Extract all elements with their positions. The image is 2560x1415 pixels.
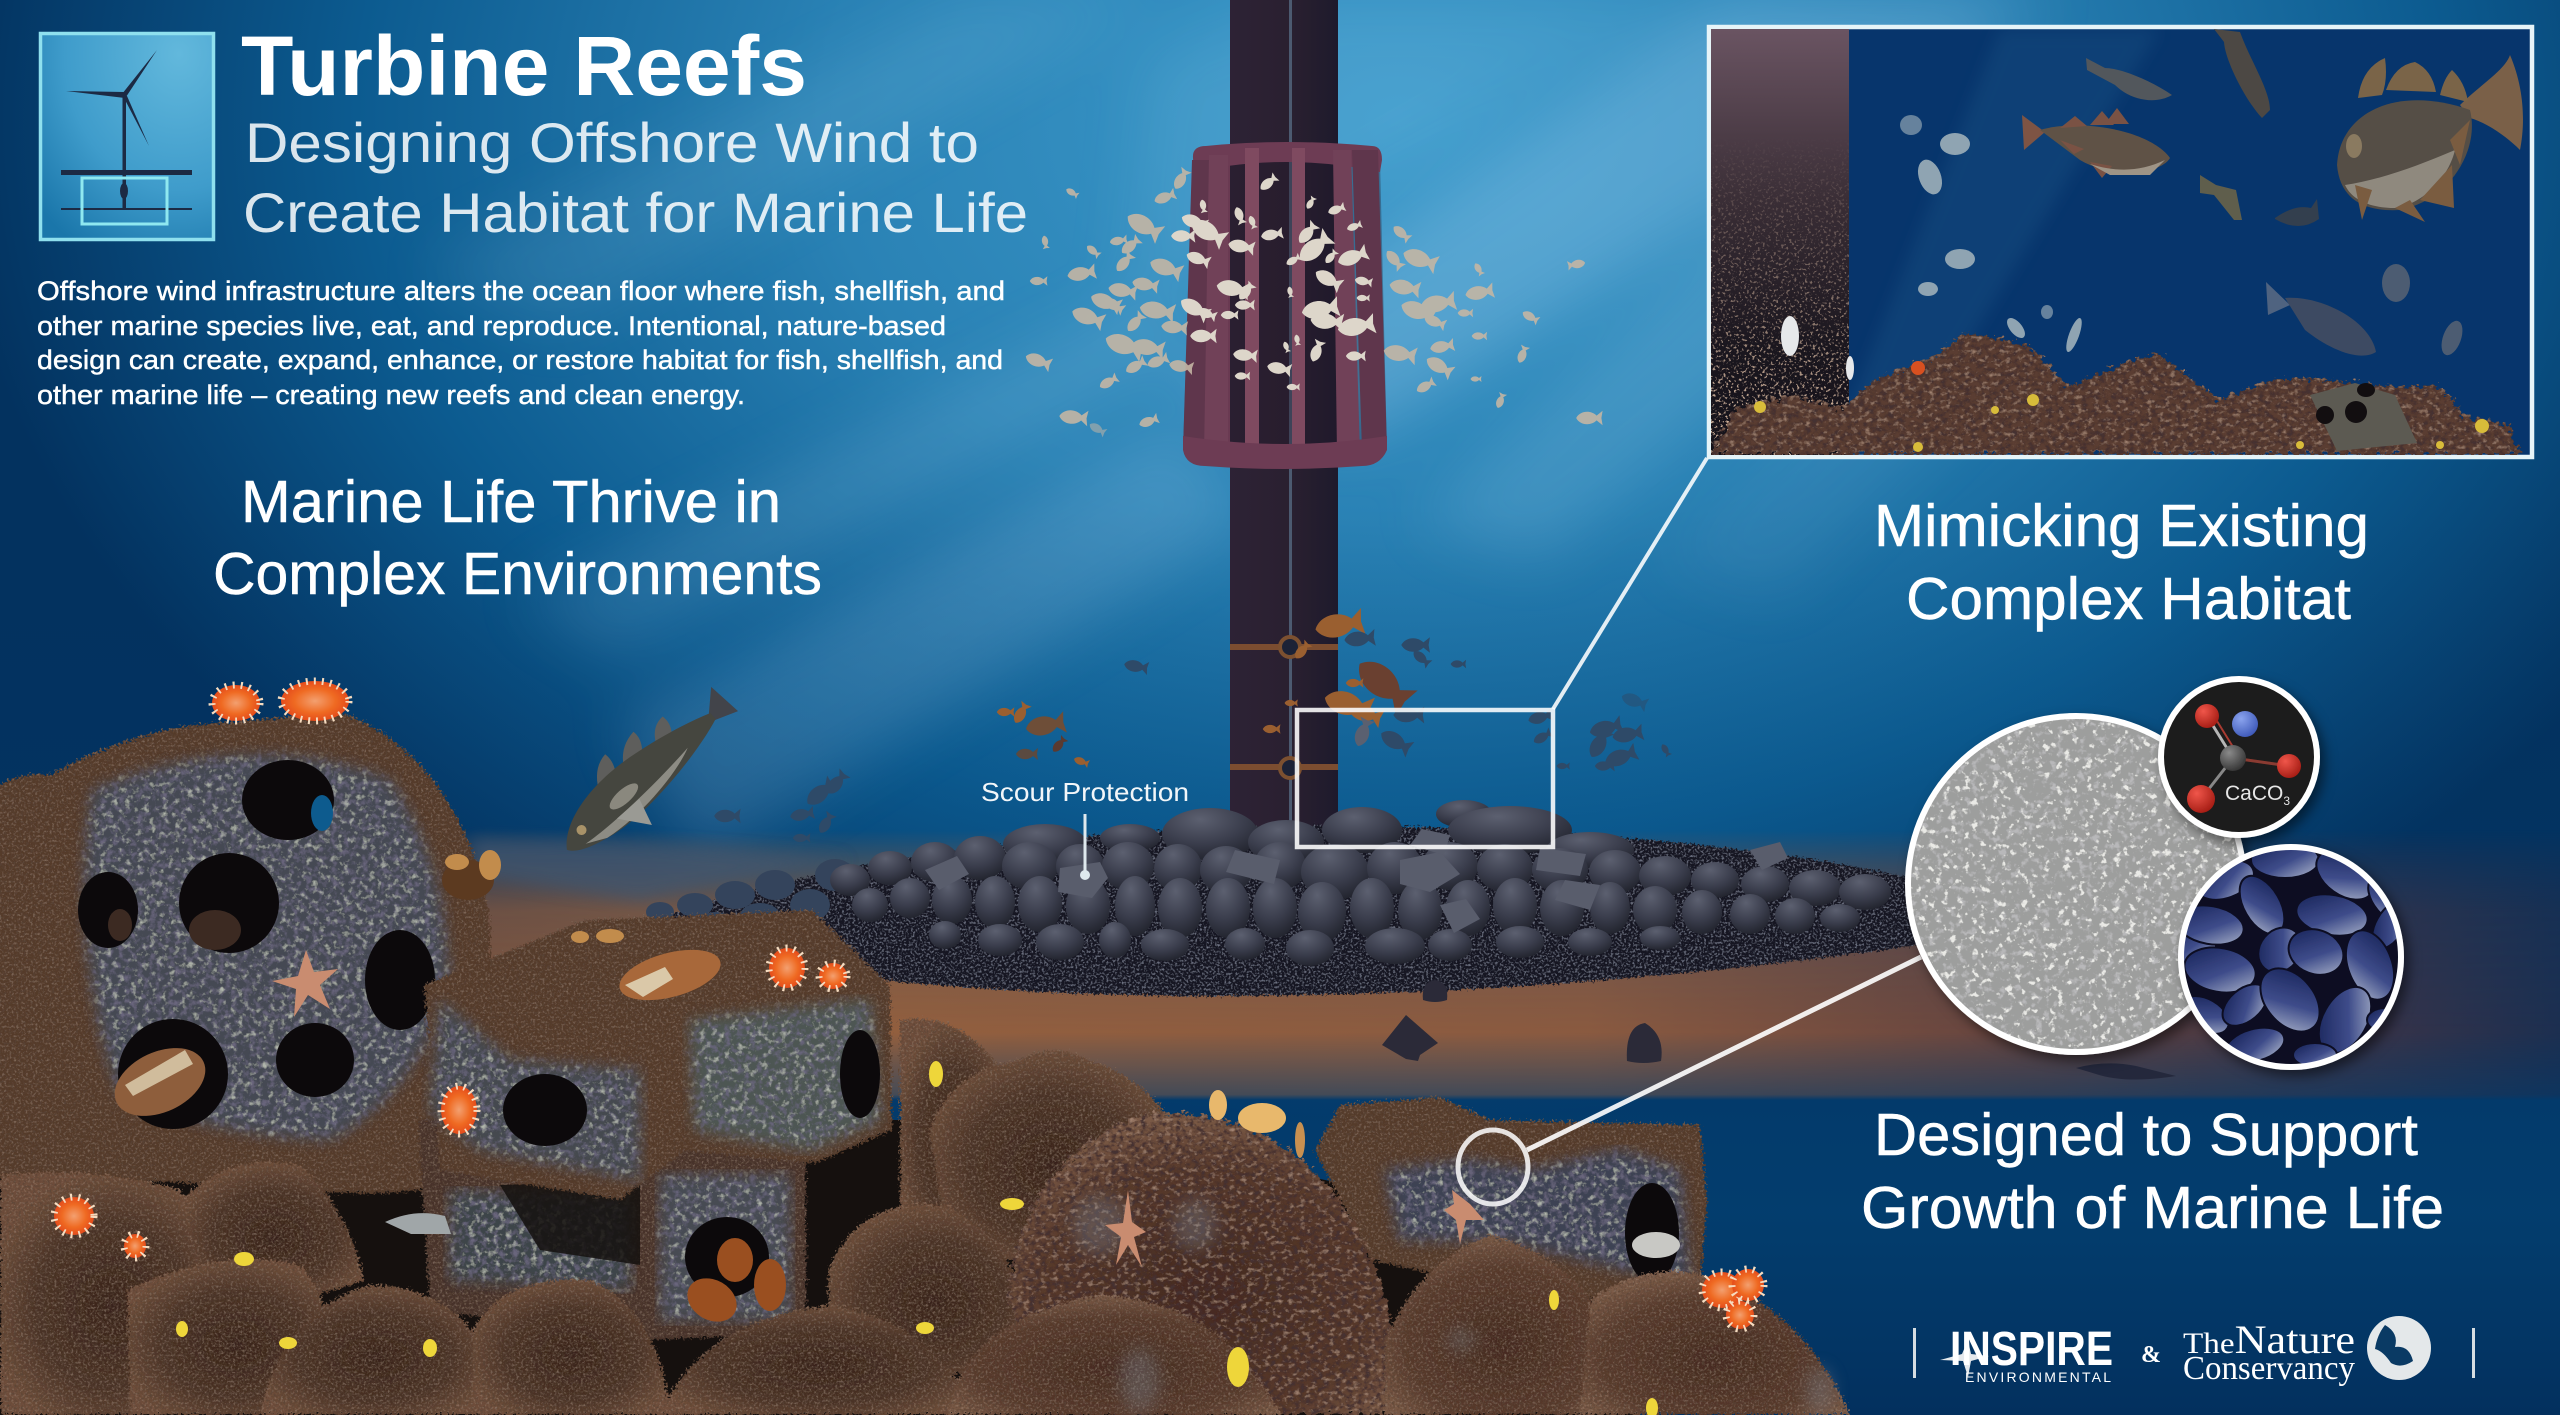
logo: The Nature Conservancy: Conservancy — [2183, 1350, 2355, 1387]
cube shadow — [500, 1180, 640, 1265]
grouper in hole — [104, 1035, 216, 1129]
dark fish schools — [714, 629, 1672, 843]
scour protection gravel base — [640, 825, 1920, 996]
starfish — [272, 950, 1484, 1267]
grouper on cube — [614, 940, 726, 1010]
lobster in hole — [679, 1238, 786, 1330]
reef module: large rounded block — [0, 712, 491, 1193]
monopile turbine foundation — [1230, 0, 1338, 850]
white fish by pile — [1781, 316, 1854, 380]
heading: designed to support — [1861, 1102, 2444, 1241]
scour protection label with leader: Scour Protection — [981, 777, 1189, 807]
calcium carbonate molecule circle: CaCO — [2225, 782, 2283, 805]
brown reef domes foreground — [0, 1019, 1175, 1415]
inset panel: mimicking complex habitat — [1709, 27, 2532, 457]
fur inside holes — [108, 909, 241, 950]
bright fish school inside the cage — [1171, 172, 1377, 391]
logo: The Nature Conservancy: TheNature — [2183, 1317, 2355, 1362]
intro paragraph: other marine life – creating new reefs and clean energy. — [37, 380, 745, 410]
big triggerfish — [2337, 55, 2523, 222]
dark shadow under foreground reef — [0, 1120, 1640, 1415]
big furry dome — [1008, 1113, 1404, 1415]
flatfish shadow on the sand — [2076, 1063, 2176, 1080]
calcium carbonate molecule circle: 3 — [2283, 794, 2290, 808]
orange anemone in inset — [1911, 361, 1925, 375]
reef module: cubes cluster — [418, 910, 892, 1340]
intro paragraph — [37, 276, 1005, 410]
small silver fish under cube — [385, 1213, 451, 1234]
connector line to highlight circle — [1527, 957, 1921, 1150]
small olive fish — [2200, 175, 2242, 220]
inset reef mound — [1711, 332, 2519, 455]
heading: mimicking habitat: Mimicking Existing — [1874, 493, 2369, 559]
cube holes — [503, 1030, 880, 1297]
highlight rectangle on base of pile with connector — [1297, 458, 1707, 847]
title: Turbine Reefs — [241, 19, 807, 113]
subtitle: Create Habitat for Marine Life — [243, 181, 1028, 244]
logo: INSPIRE Environmental: INSPIRE — [1950, 1323, 2113, 1376]
pile ring band lower — [1230, 758, 1338, 778]
fish cage reef around the pile — [1183, 142, 1387, 469]
distant dark rock band at left horizon — [470, 838, 850, 900]
concrete reef units among the rocks — [925, 829, 1788, 933]
intro paragraph: design can create, expand, enhance, or restore habitat for fish, shellfish, and — [37, 345, 1003, 375]
small boulders on the sand — [1382, 980, 1662, 1063]
logo: INSPIRE Environmental: ENVIRONMENTAL — [1965, 1369, 2111, 1385]
heading: mimicking habitat: Complex Habitat — [1906, 566, 2351, 632]
logo: The Nature Conservancy — [2183, 1316, 2431, 1387]
calcium carbonate molecule circle — [2161, 679, 2317, 835]
sea floor sand — [465, 836, 2560, 1100]
ampersand: & — [2141, 1342, 2161, 1368]
heading: marine life: Complex Environments — [213, 541, 822, 607]
swimming cod fish — [536, 669, 757, 878]
domes lower row — [948, 1235, 1850, 1415]
subtitle — [243, 111, 1028, 244]
vertical fish top — [2214, 29, 2270, 118]
subtitle: Designing Offshore Wind to — [245, 111, 979, 174]
highlight circle on reef unit — [1458, 1130, 1528, 1204]
inset reef unit — [2310, 383, 2417, 451]
pale concrete patches on domes — [1072, 1195, 1834, 1414]
partner logos — [1913, 1316, 2475, 1387]
intro paragraph: other marine species live, eat, and reproduce. Intentional, nature-based — [37, 311, 946, 341]
heading: designed to support: Growth of Marine Life — [1861, 1175, 2444, 1241]
small dark fish — [2275, 199, 2319, 226]
inset pile — [1711, 29, 1849, 455]
pale fish school around the cage — [1023, 167, 1603, 437]
yellow sponges in inset — [1754, 394, 2489, 452]
concrete texture circle — [1908, 716, 2244, 1052]
medium cod fish — [2022, 108, 2170, 178]
brown fish school near the pile — [997, 608, 1418, 768]
upper grey fish — [2086, 58, 2172, 100]
heading: marine life: Marine Life Thrive in — [241, 469, 781, 535]
small pale fish group — [1900, 115, 2085, 354]
small rockfish right — [2382, 264, 2467, 358]
light rays — [420, 0, 2180, 860]
inset pile fish speckle — [1711, 154, 1849, 455]
icon: turbine in water — [40, 34, 214, 240]
yellow sponges — [176, 1061, 1658, 1415]
heading: marine life — [213, 469, 822, 607]
crabs — [442, 850, 1305, 1158]
reef module: right block with highlight spot — [1315, 1097, 1707, 1300]
scour protection rock pile — [830, 800, 1891, 966]
holes — [78, 760, 435, 1129]
blue rockfish — [2266, 282, 2376, 356]
heading: mimicking habitat — [1874, 493, 2369, 632]
intro paragraph: Offshore wind infrastructure alters the ocean floor where fish, shellfish, and — [37, 276, 1005, 306]
faded rocks at left of pile — [646, 859, 855, 932]
mussels circle — [2164, 840, 2420, 1069]
anemones — [54, 681, 1764, 1329]
scour protection label with leader — [981, 777, 1189, 880]
heading: designed to support: Designed to Support — [1874, 1102, 2418, 1168]
water glimpse through hole — [311, 795, 333, 831]
pile ring band upper — [1230, 637, 1338, 657]
